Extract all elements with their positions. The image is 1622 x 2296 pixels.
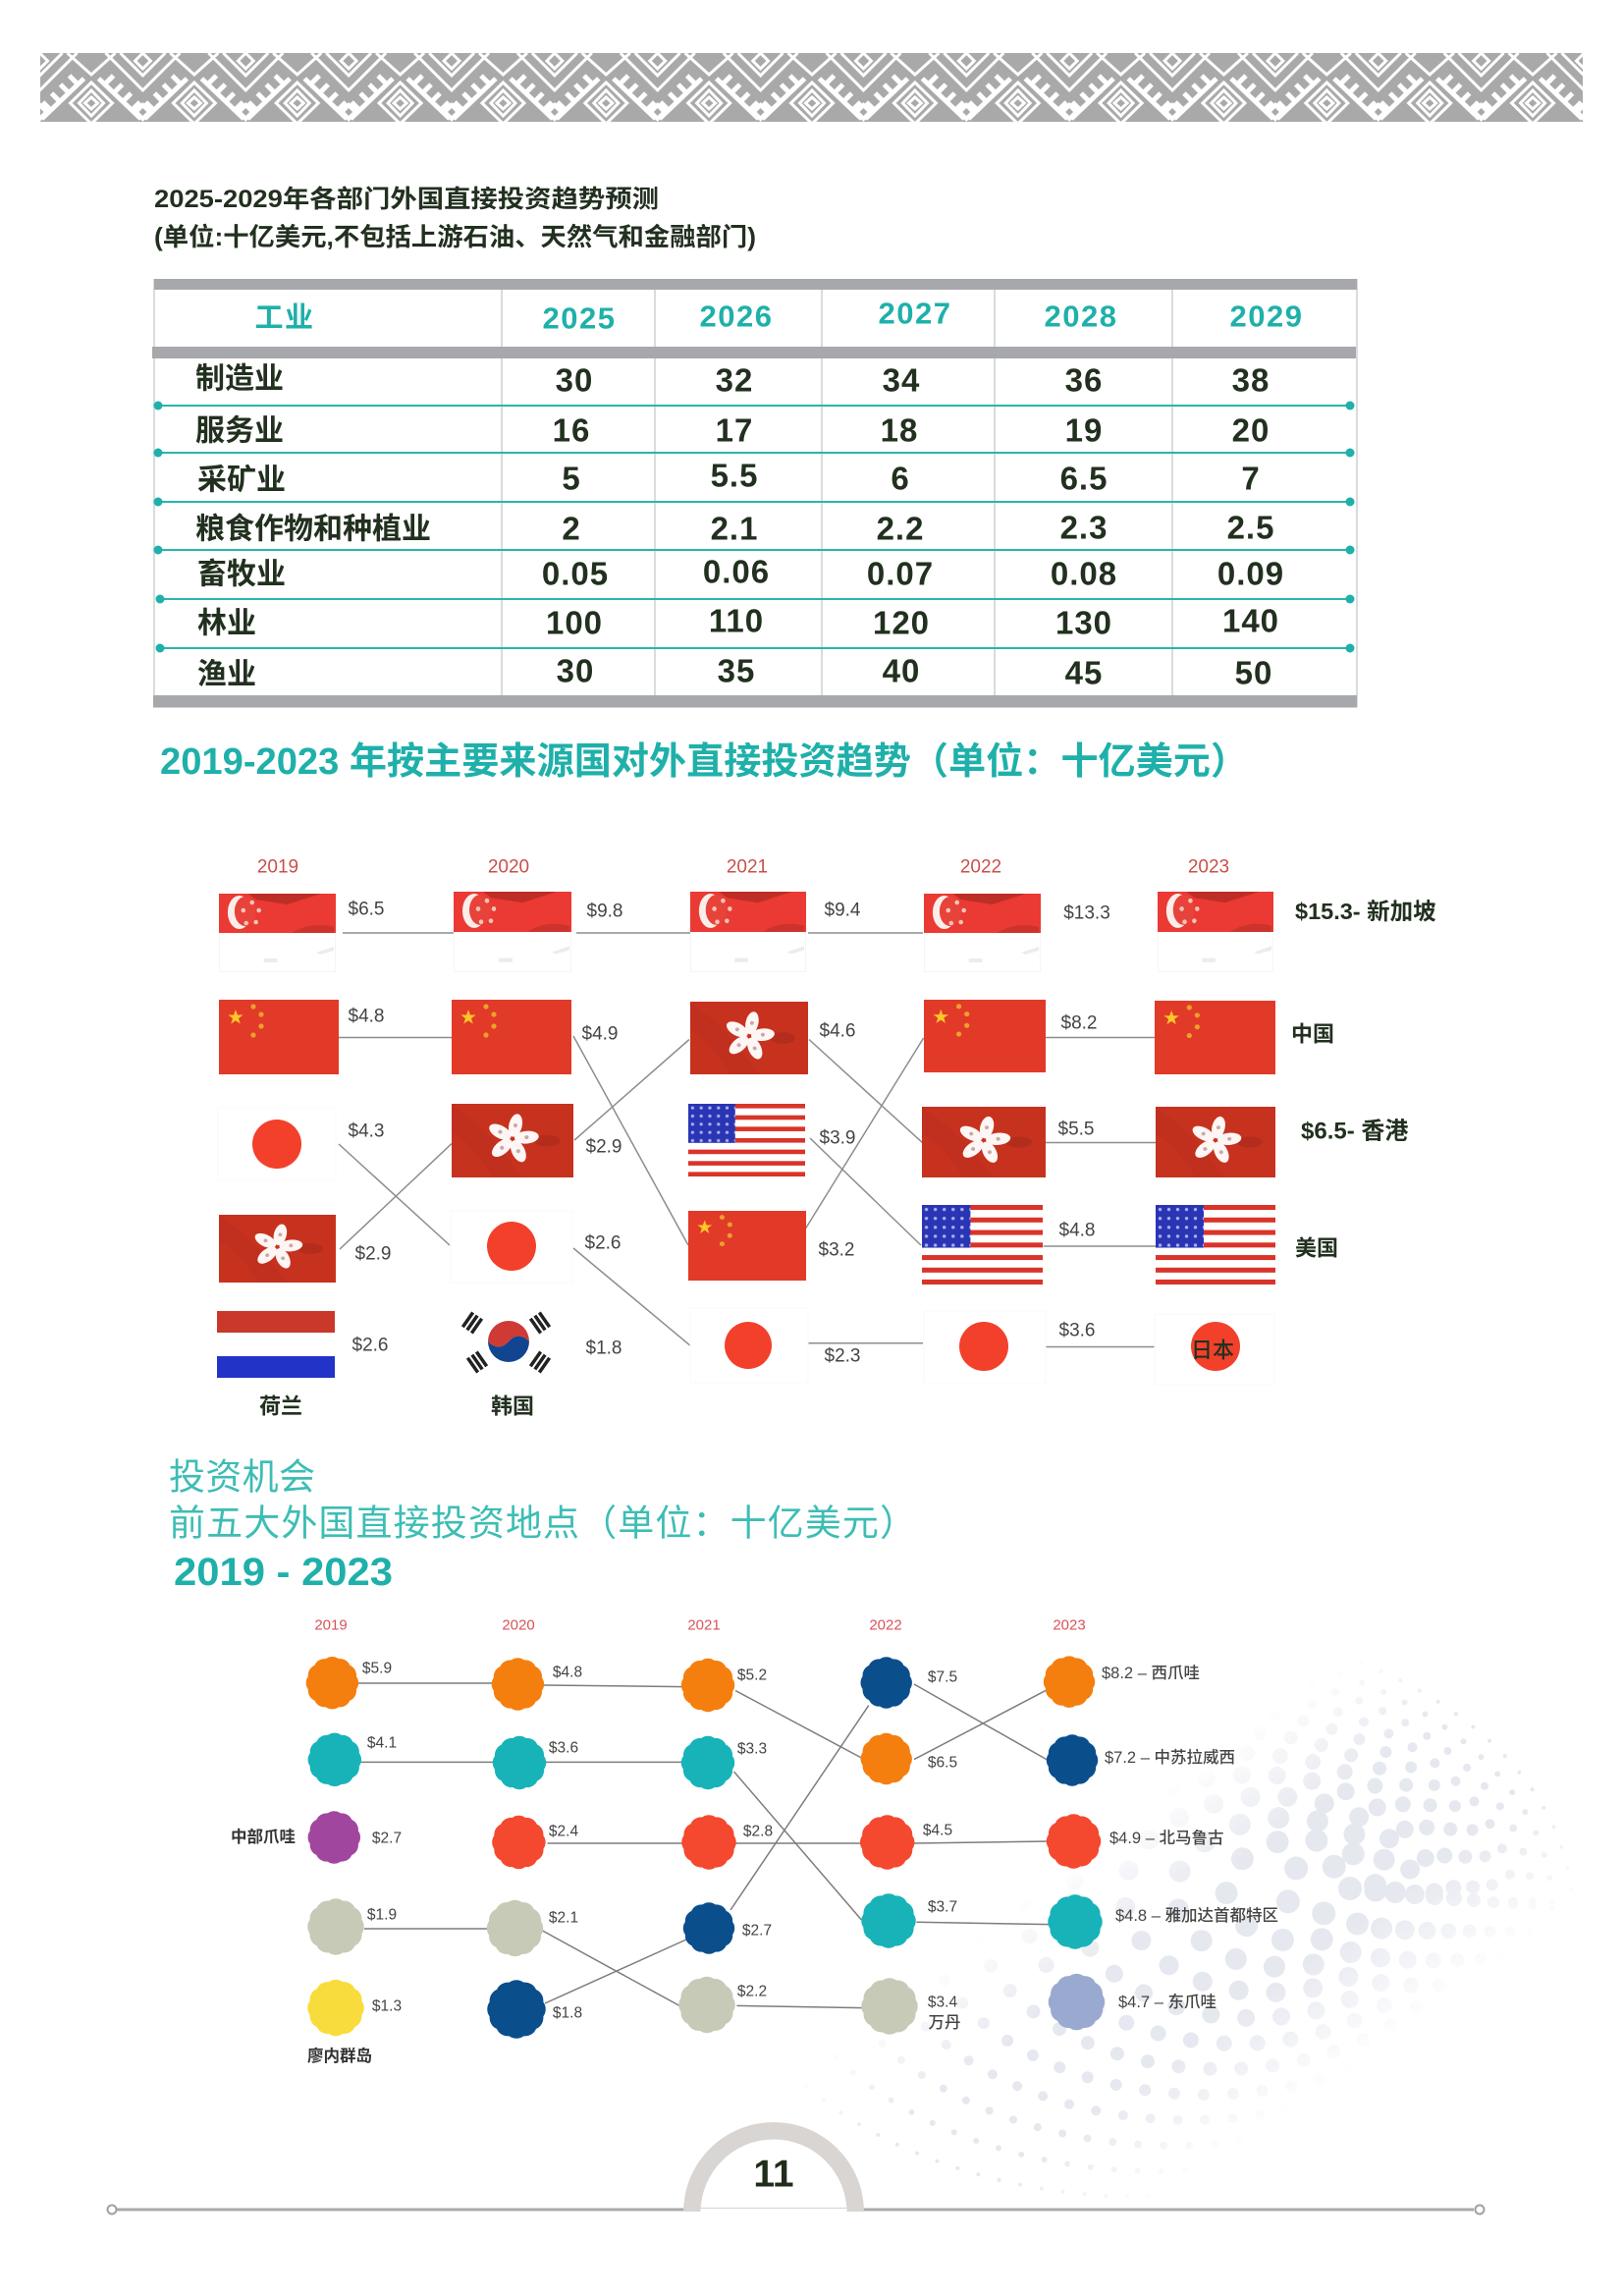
country name labels: 荷兰 bbox=[259, 1394, 302, 1418]
year labels bbox=[257, 856, 1229, 878]
value labels: 万丹 bbox=[929, 2014, 960, 2032]
year labels: 2022 bbox=[960, 856, 1001, 878]
row: manufacturing: 制造业 bbox=[195, 363, 284, 395]
row: livestock: 0.06 bbox=[703, 554, 770, 589]
row: services bbox=[195, 412, 1270, 448]
value labels: $4.9 bbox=[582, 1023, 618, 1045]
location labels: 廖内群岛 bbox=[307, 2046, 372, 2065]
row: crops bbox=[195, 509, 1274, 546]
row: crops: 2 bbox=[562, 511, 581, 546]
location labels bbox=[231, 1664, 1278, 2065]
chart: top five FDI locations bbox=[231, 1616, 1278, 2065]
table header row: 2028 bbox=[1045, 299, 1117, 334]
year labels: 2023 bbox=[1188, 856, 1229, 878]
country name labels bbox=[259, 899, 1436, 1418]
row: mining: 5.5 bbox=[711, 458, 758, 493]
value labels: $1.8 bbox=[553, 2005, 582, 2021]
country name labels: $15.3- 新加坡 bbox=[1295, 899, 1436, 924]
row: livestock: 0.08 bbox=[1051, 556, 1117, 591]
value labels: $5.2 bbox=[737, 1667, 767, 1683]
row: services: 16 bbox=[553, 412, 590, 448]
row: crops: 2.1 bbox=[711, 511, 758, 546]
value labels: $2.6 bbox=[585, 1233, 621, 1253]
value labels: $4.1 bbox=[367, 1734, 397, 1752]
value labels: $6.5 bbox=[349, 900, 384, 919]
value labels: $2.2 bbox=[737, 1984, 767, 1999]
heading: source countries: 2019-2023 年按主要来源国对外直接投资趋势（单位：十亿美元） bbox=[160, 741, 1248, 783]
flags: 2022 column bbox=[922, 894, 1046, 1384]
year labels: 2022 bbox=[869, 1616, 902, 1634]
connector lines bbox=[339, 933, 1156, 1347]
year labels: 2021 bbox=[687, 1616, 721, 1634]
row: services: 20 bbox=[1232, 412, 1270, 448]
location labels: $7.2 – 中苏拉威西 bbox=[1105, 1747, 1235, 1767]
value labels: $13.3 bbox=[1063, 903, 1110, 923]
year labels: 2021 bbox=[727, 856, 768, 878]
row: fishery: 50 bbox=[1235, 654, 1272, 691]
year labels: 2020 bbox=[488, 856, 529, 878]
row: crops: 2.3 bbox=[1060, 509, 1108, 546]
row: fishery: 35 bbox=[718, 652, 755, 689]
value labels: $6.5 bbox=[928, 1754, 957, 1772]
heading: investment opportunities bbox=[169, 1457, 916, 1594]
row: forestry: 110 bbox=[709, 603, 764, 638]
value labels: $5.5 bbox=[1058, 1120, 1094, 1139]
row: manufacturing bbox=[195, 361, 1270, 399]
row: livestock bbox=[197, 554, 1284, 591]
value labels: $3.9 bbox=[820, 1127, 855, 1149]
flag: South Korea bbox=[444, 1303, 569, 1382]
table header row: 2025 bbox=[543, 301, 616, 336]
value labels: $2.4 bbox=[549, 1823, 578, 1840]
table header row bbox=[254, 297, 1303, 336]
value labels: $4.3 bbox=[349, 1121, 384, 1141]
row: manufacturing: 38 bbox=[1232, 361, 1270, 399]
table header row: 2029 bbox=[1230, 299, 1303, 334]
country name labels: $6.5- 香港 bbox=[1301, 1118, 1408, 1145]
value labels: $3.3 bbox=[737, 1740, 767, 1758]
row: mining bbox=[197, 458, 1261, 497]
location labels: $4.9 – 北马鲁古 bbox=[1109, 1829, 1223, 1847]
row: forestry: 林业 bbox=[197, 607, 256, 640]
location labels: 中部爪哇 bbox=[231, 1827, 296, 1846]
markers: 2021 column bbox=[673, 1653, 741, 2039]
value labels: $4.5 bbox=[923, 1823, 952, 1838]
table title: (单位:十亿美元,不包括上游石油、天然气和金融部门) bbox=[154, 223, 756, 251]
row: mining: 采矿业 bbox=[197, 464, 286, 497]
flags: 2019 column bbox=[217, 894, 339, 1378]
row: livestock: 0.05 bbox=[542, 556, 609, 591]
row: fishery: 40 bbox=[883, 652, 920, 689]
row: services: 19 bbox=[1065, 412, 1103, 448]
value labels: $4.8 bbox=[553, 1664, 582, 1681]
country name labels: 韩国 bbox=[491, 1394, 534, 1418]
table title bbox=[154, 186, 756, 251]
value labels: $9.8 bbox=[587, 902, 622, 921]
flags: 2023 column bbox=[1155, 892, 1275, 1385]
location labels: $4.7 – 东爪哇 bbox=[1118, 1993, 1216, 2011]
markers: 2020 column bbox=[481, 1653, 552, 2045]
year labels: 2019 bbox=[257, 856, 298, 878]
heading: investment opportunities: 2019 - 2023 bbox=[174, 1551, 393, 1594]
table header row: 2026 bbox=[700, 299, 773, 334]
markers: 2023 column bbox=[1039, 1651, 1110, 2036]
footer line bbox=[108, 2206, 1485, 2214]
value labels: $3.6 bbox=[549, 1740, 578, 1756]
value labels bbox=[349, 900, 1110, 1367]
row: manufacturing: 32 bbox=[716, 361, 753, 399]
row: fishery: 渔业 bbox=[197, 658, 256, 691]
value labels: $2.9 bbox=[355, 1243, 391, 1265]
value labels: $9.4 bbox=[825, 900, 861, 921]
country name labels: 中国 bbox=[1291, 1021, 1334, 1047]
row: fishery bbox=[197, 652, 1272, 691]
row: forestry: 140 bbox=[1222, 603, 1279, 638]
year labels: 2019 bbox=[314, 1616, 348, 1634]
chart: source country flag ranking bbox=[217, 856, 1436, 1418]
halftone dot background bbox=[822, 1669, 1567, 2198]
value labels: $3.4 bbox=[928, 1994, 957, 2011]
value labels: $2.9 bbox=[586, 1137, 622, 1157]
value labels: $8.2 bbox=[1061, 1013, 1097, 1033]
value labels: $3.2 bbox=[819, 1239, 854, 1261]
row: mining: 7 bbox=[1241, 460, 1261, 497]
row: fishery: 45 bbox=[1065, 654, 1103, 691]
row: services: 18 bbox=[881, 412, 918, 448]
row: forestry bbox=[197, 603, 1279, 640]
row: crops: 2.5 bbox=[1227, 509, 1274, 546]
value labels: $4.8 bbox=[1059, 1220, 1095, 1241]
row: mining: 6.5 bbox=[1060, 460, 1108, 497]
location labels: $4.8 – 雅加达首都特区 bbox=[1115, 1906, 1278, 1925]
row: manufacturing: 34 bbox=[883, 361, 920, 399]
row: mining: 5 bbox=[562, 460, 581, 497]
row: services: 服务业 bbox=[195, 414, 284, 448]
value labels bbox=[362, 1660, 960, 2032]
value labels: $5.9 bbox=[362, 1660, 392, 1677]
flags: 2020 column bbox=[444, 892, 573, 1382]
flags: 2021 column bbox=[688, 892, 808, 1383]
value labels: $7.5 bbox=[928, 1669, 957, 1685]
row: livestock: 0.09 bbox=[1217, 556, 1284, 591]
row: fishery: 30 bbox=[557, 652, 594, 689]
value labels: $4.8 bbox=[349, 1006, 384, 1027]
table title: 2025-2029年各部门外国直接投资趋势预测 bbox=[154, 186, 659, 213]
value labels: $2.7 bbox=[742, 1923, 772, 1939]
value labels: $1.3 bbox=[372, 1997, 402, 2015]
row: crops: 粮食作物和种植业 bbox=[195, 513, 431, 546]
row: crops: 2.2 bbox=[877, 511, 924, 546]
row: forestry: 120 bbox=[873, 605, 930, 640]
value labels: $1.8 bbox=[586, 1338, 622, 1359]
row: mining: 6 bbox=[891, 460, 910, 497]
year labels: 2023 bbox=[1053, 1616, 1086, 1634]
header pattern band bbox=[40, 53, 1583, 122]
year labels: 2020 bbox=[502, 1616, 535, 1634]
value labels: $3.7 bbox=[928, 1899, 957, 1915]
year labels bbox=[314, 1616, 1086, 1634]
value labels: $3.6 bbox=[1059, 1320, 1095, 1341]
row: manufacturing: 30 bbox=[556, 361, 593, 399]
value labels: $2.8 bbox=[743, 1823, 773, 1840]
markers: 2019 column bbox=[300, 1652, 370, 2042]
row: forestry: 100 bbox=[546, 605, 603, 640]
value labels: $4.6 bbox=[820, 1021, 855, 1041]
country name labels: 美国 bbox=[1295, 1235, 1338, 1261]
row: manufacturing: 36 bbox=[1065, 361, 1103, 399]
connector lines bbox=[358, 1683, 1050, 2008]
row: forestry: 130 bbox=[1055, 605, 1112, 640]
markers: 2022 column bbox=[854, 1652, 924, 2041]
row: livestock: 0.07 bbox=[867, 556, 934, 591]
value labels: $1.9 bbox=[367, 1907, 397, 1923]
row: services: 17 bbox=[716, 412, 753, 448]
value labels: $2.7 bbox=[372, 1831, 402, 1846]
location labels: $8.2 – 西爪哇 bbox=[1102, 1664, 1200, 1682]
page number arch bbox=[683, 2122, 864, 2213]
value labels: $2.6 bbox=[352, 1336, 388, 1355]
value labels: $2.3 bbox=[825, 1345, 860, 1367]
row: livestock: 畜牧业 bbox=[197, 558, 286, 591]
table header row: 2027 bbox=[879, 297, 951, 330]
value labels: $2.1 bbox=[549, 1909, 578, 1927]
heading: investment opportunities: 投资机会 bbox=[169, 1457, 315, 1497]
heading: investment opportunities: 前五大外国直接投资地点（单位：十亿美元） bbox=[169, 1503, 916, 1544]
country name labels: 日本 bbox=[1191, 1338, 1234, 1363]
table header row: 工业 bbox=[254, 301, 315, 334]
panel: forecast table bbox=[152, 279, 1357, 707]
page number arch: 11 bbox=[753, 2153, 794, 2196]
